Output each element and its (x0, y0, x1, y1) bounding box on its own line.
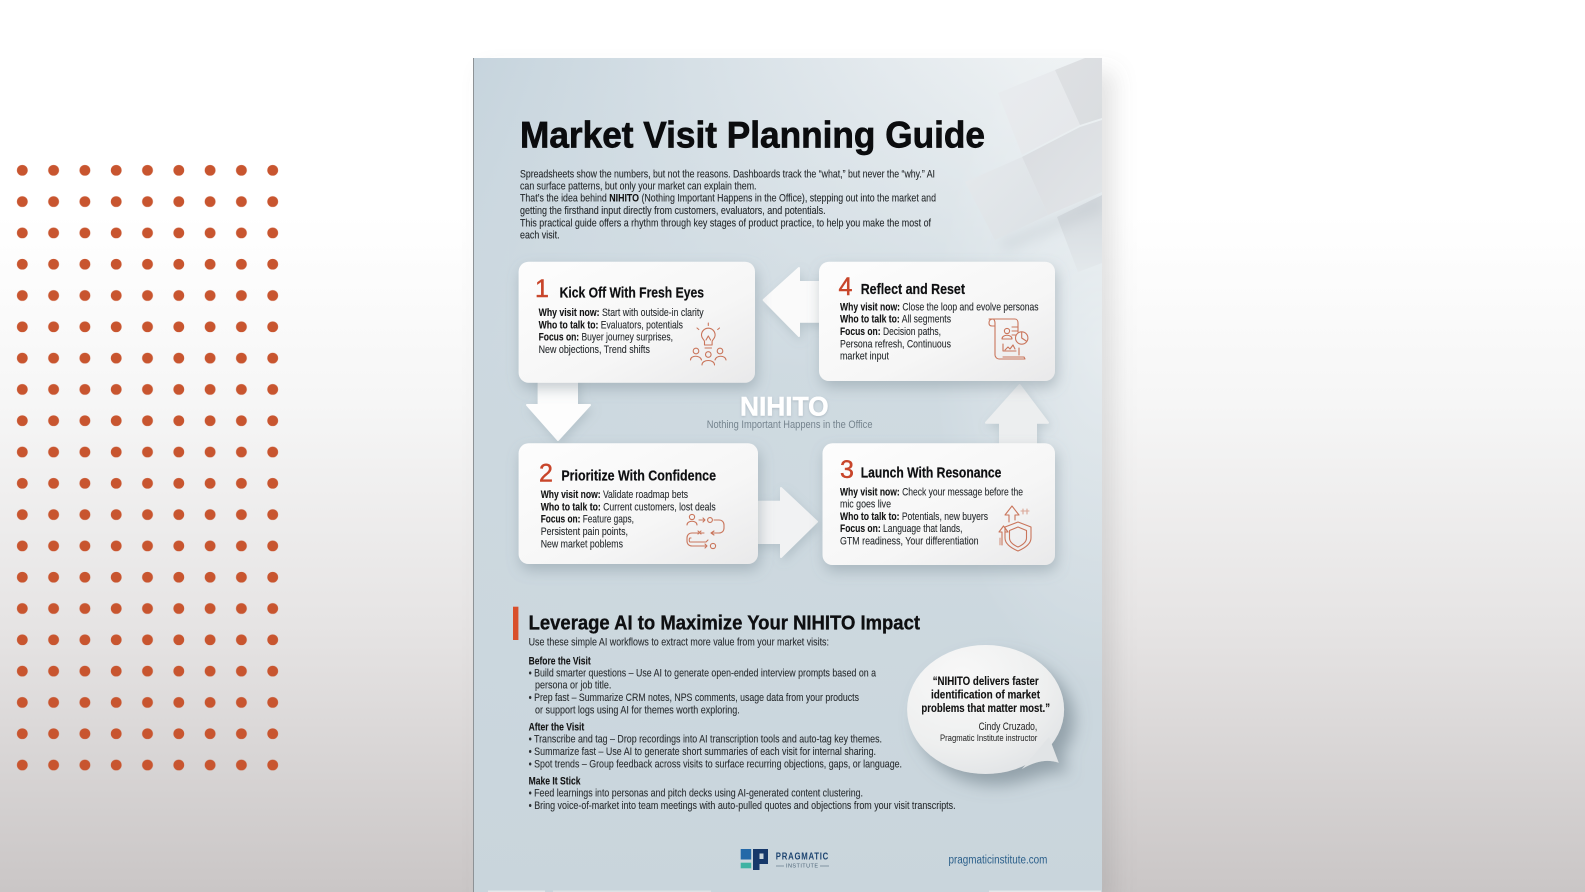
step 3 text: Why visit now: Check your message before the (840, 486, 1023, 498)
step 3 heading: Launch With Resonance (861, 465, 1001, 481)
logo: Pragmatic Institute: INSTITUTE (786, 864, 818, 870)
center label: NIHITO (707, 392, 872, 431)
arrow: step 3 to step 4 (986, 385, 1048, 450)
panel: step 4 (819, 262, 1055, 381)
step 4 text: Persona refresh, Continuous (840, 338, 951, 350)
panel: step 1 (519, 262, 755, 383)
quote text (921, 676, 1050, 715)
AI workflows text: • Feed learnings into personas and pitch decks using AI-generated content clustering. (529, 788, 863, 800)
title: Market Visit Planning Guide (520, 114, 985, 156)
step 1 text: Who to talk to: Evaluators, potentials (539, 319, 683, 331)
AI workflows text: • Prep fast – Summarize CRM notes, NPS comments, usage data from your products (529, 692, 859, 704)
panel: step 3 (822, 443, 1055, 565)
icon: report scroll with chart (989, 319, 1028, 359)
intro text: Spreadsheets show the numbers, but not the reasons. Dashboards track the “what,” but never the “why.” AI (520, 168, 935, 180)
AI workflows text: • Build smarter questions – Use AI to generate open-ended interview prompts based on a (529, 667, 876, 679)
AI workflows text: Before the Visit (529, 655, 591, 667)
step 2 text: Why visit now: Validate roadmap bets (541, 489, 688, 501)
step 4 text: Who to talk to: All segments (840, 314, 951, 326)
center label: NIHITO: Nothing Important Happens in the Office (707, 419, 872, 431)
step 1 text: New objections, Trend shifts (539, 344, 650, 356)
AI workflows text: • Summarize fast – Use AI to generate short summaries of each visit for internal sharing. (529, 746, 876, 758)
step 2 text: Persistent pain points, (541, 526, 628, 538)
callout: quote bubble (907, 645, 1064, 774)
step 1 number: 1 (535, 275, 549, 303)
step 3 number: 3 (840, 456, 854, 484)
arrow: step 1 to step 2 (527, 375, 590, 440)
quote attribution (940, 721, 1037, 743)
arrow: step 2 to step 3 (750, 488, 817, 557)
AI workflows text: • Transcribe and tag – Drop recordings into AI transcription tools and auto-tag key themes. (529, 734, 882, 746)
quote text: “NIHITO delivers faster (933, 676, 1039, 688)
step 2 number: 2 (539, 460, 553, 488)
step 3 text: Who to talk to: Potentials, new buyers (840, 511, 988, 523)
AI workflows text: persona or job title. (535, 680, 611, 692)
AI workflows text: Make It Stick (529, 775, 581, 787)
intro text (520, 168, 936, 242)
intro text: This practical guide offers a rhythm through key stages of product practice, to help you make the most of (520, 217, 932, 229)
logo: Pragmatic Institute: PRAGMATIC (776, 850, 829, 862)
dot grid decoration (7, 155, 288, 781)
center label: NIHITO: NIHITO (740, 392, 829, 422)
step 2 text: Focus on: Feature gaps, (541, 514, 634, 526)
step 1 heading: Kick Off With Fresh Eyes (560, 285, 704, 301)
step 3 text: mic goes live (840, 499, 891, 511)
step 1 text: Focus on: Buyer journey surprises, (539, 332, 673, 344)
website link text: pragmaticinstitute.com (948, 854, 1047, 866)
quote text: problems that matter most.” (921, 703, 1050, 715)
step 2 text: New market poblems (541, 538, 623, 550)
step 4 text: market input (840, 351, 889, 363)
quote attribution: Pragmatic Institute instructor (940, 733, 1037, 743)
AI workflows text: • Spot trends – Group feedback across visits to surface recurring objections, gaps, or language. (529, 758, 902, 770)
quote text: identification of market (931, 690, 1040, 702)
AI workflows text: or support logs using AI for themes worth exploring. (535, 704, 740, 716)
step 1 text: Why visit now: Start with outside-in clarity (539, 307, 704, 319)
step 4 text: Why visit now: Close the loop and evolve personas (840, 301, 1039, 313)
step 2 text: Who to talk to: Current customers, lost deals (541, 502, 716, 514)
icon: shield with arrows (999, 506, 1031, 551)
AI workflows text: Use these simple AI workflows to extract more value from your market visits: (529, 637, 829, 649)
intro text: can surface patterns, but only your market can explain them. (520, 180, 756, 192)
arrow: step 4 to step 1 (764, 268, 825, 336)
step 1 text (539, 307, 704, 356)
accent bar (513, 607, 518, 640)
step 2 text (541, 489, 716, 550)
icon: workflow path (687, 514, 724, 549)
step 3 text (840, 486, 1023, 547)
step 3 text: GTM readiness, Your differentiation (840, 535, 979, 547)
step 4 number: 4 (838, 273, 852, 301)
AI workflows text: After the Visit (529, 721, 585, 733)
step 2 heading: Prioritize With Confidence (561, 469, 716, 485)
step 4 text (840, 301, 1039, 363)
step 3 text: Focus on: Language that lands, (840, 523, 962, 535)
intro text: getting the firsthand input directly from customers, evaluators, and potentials. (520, 205, 826, 217)
panel: guide document (473, 58, 1119, 892)
step 4 text: Focus on: Decision paths, (840, 326, 941, 338)
step 4 heading: Reflect and Reset (861, 282, 965, 298)
icon: lightbulb and people (690, 323, 726, 365)
logo: Pragmatic Institute (741, 849, 829, 870)
quote attribution: Cindy Cruzado, (979, 721, 1037, 733)
intro text: each visit. (520, 230, 560, 242)
decorative folded squares (1010, 58, 1102, 249)
intro text: That’s the idea behind NIHITO (Nothing Important Happens in the Office), stepping out into the market and (520, 193, 936, 205)
AI workflows text: • Bring voice-of-market into team meetings with auto-pulled quotes and objections from your visit transcripts. (529, 800, 956, 812)
AI workflows text (529, 637, 956, 812)
panel: step 2 (519, 443, 758, 564)
section heading: AI: Leverage AI to Maximize Your NIHITO Impact (529, 612, 920, 634)
